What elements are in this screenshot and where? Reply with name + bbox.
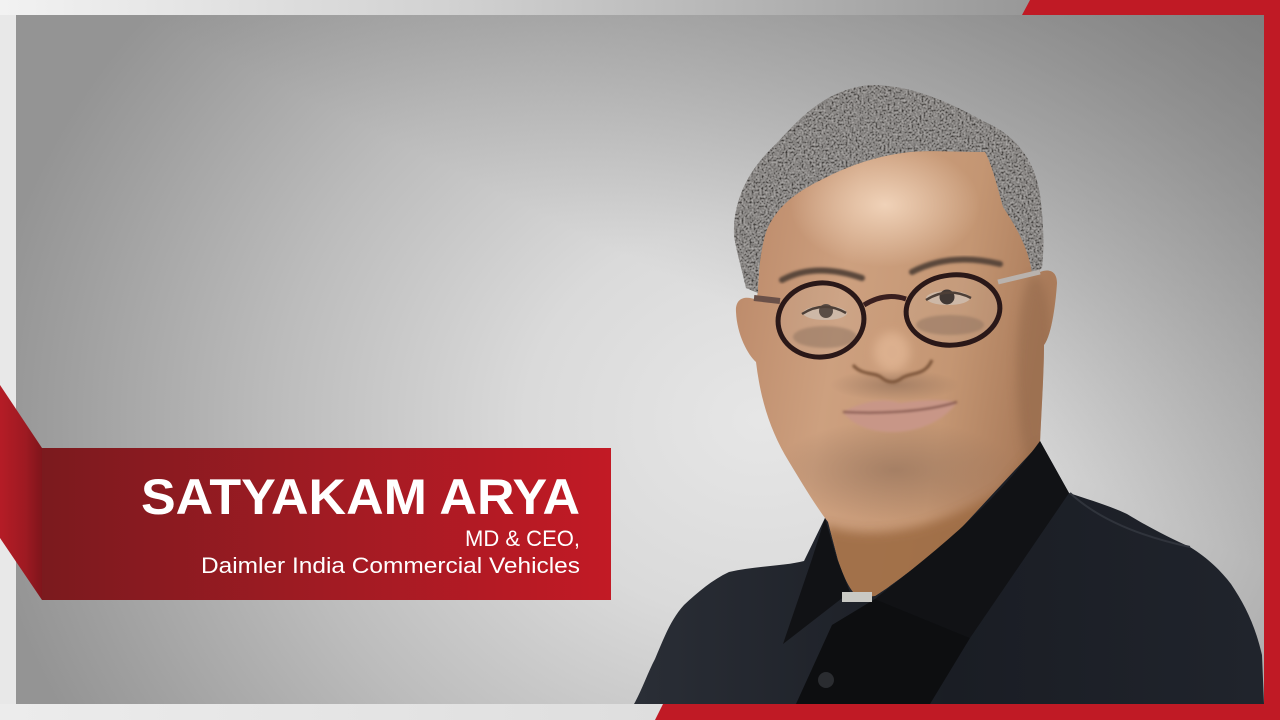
hair bbox=[734, 85, 1043, 293]
eyes bbox=[793, 290, 984, 348]
nose bbox=[853, 332, 932, 382]
red frame corner bbox=[655, 0, 1280, 720]
neck and face bbox=[736, 110, 1057, 597]
portrait photo illustration bbox=[634, 85, 1264, 704]
eyebrows bbox=[782, 260, 1000, 280]
ribbon fold bbox=[0, 385, 42, 600]
mouth bbox=[843, 400, 957, 432]
company: Daimler India Commercial Vehicles bbox=[201, 553, 580, 578]
glasses bbox=[754, 270, 1040, 361]
shirt body bbox=[634, 441, 1264, 704]
polo collar and placket bbox=[783, 441, 1190, 704]
face shading bbox=[802, 153, 1052, 596]
name banner bbox=[42, 448, 611, 600]
name: SATYAKAM ARYA bbox=[141, 469, 580, 525]
role: MD & CEO, bbox=[465, 526, 580, 551]
